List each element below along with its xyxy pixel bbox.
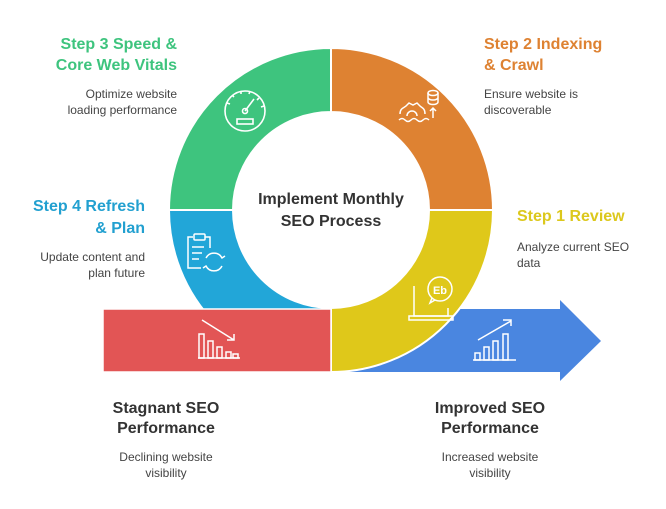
text: step 4 bbox=[33, 198, 145, 280]
icon: review laptop: Eb bbox=[433, 285, 447, 297]
center title: SEO Process bbox=[281, 213, 381, 230]
text: step 2: discoverable bbox=[484, 103, 552, 117]
text: step 1 bbox=[517, 208, 629, 270]
arrow: improved performance bbox=[331, 300, 601, 381]
text: step 4: & Plan bbox=[95, 220, 145, 237]
icon: refresh plan bbox=[188, 234, 225, 271]
text: step 2: Step 2 Indexing bbox=[484, 36, 602, 53]
icon: rising chart bbox=[473, 320, 516, 360]
center title bbox=[258, 191, 404, 230]
text: step 2 bbox=[484, 36, 602, 117]
text: improved: visibility bbox=[469, 466, 511, 480]
text: stagnant: visibility bbox=[145, 466, 187, 480]
text: stagnant bbox=[113, 400, 219, 480]
text: step 4: Step 4 Refresh bbox=[33, 198, 145, 215]
text: step 3: Optimize website bbox=[86, 87, 177, 101]
text: step 1: Step 1 Review bbox=[517, 208, 625, 225]
text: step 1: Analyze current SEO bbox=[517, 240, 629, 254]
text: stagnant: Performance bbox=[117, 420, 215, 437]
center title: Implement Monthly bbox=[258, 191, 404, 208]
ring segment: step 2 orange bbox=[331, 48, 493, 210]
text: step 3: Step 3 Speed & bbox=[61, 36, 177, 53]
icon: review laptop bbox=[409, 277, 453, 320]
text: step 4: Update content and bbox=[40, 250, 145, 264]
text: step 2: & Crawl bbox=[484, 57, 544, 74]
text: stagnant: Stagnant SEO bbox=[113, 400, 219, 417]
text: step 2: Ensure website is bbox=[484, 87, 578, 101]
ring segment: step 1 yellow bbox=[331, 210, 493, 372]
text: improved: Increased website bbox=[442, 450, 539, 464]
icon: indexing crawl bbox=[399, 90, 438, 122]
icon: speedometer bbox=[225, 91, 265, 131]
text: stagnant: Declining website bbox=[119, 450, 213, 464]
text: step 1: data bbox=[517, 256, 541, 270]
ring segment: step 3 green bbox=[169, 48, 331, 210]
text: step 3 bbox=[56, 36, 177, 117]
red bar: stagnant bbox=[103, 309, 331, 372]
text: improved: Performance bbox=[441, 420, 539, 437]
text: step 3: loading performance bbox=[68, 103, 177, 117]
text: improved: Improved SEO bbox=[435, 400, 545, 417]
text: step 4: plan future bbox=[88, 266, 145, 280]
icon: declining chart bbox=[198, 320, 240, 358]
text: improved bbox=[435, 400, 545, 480]
text: step 3: Core Web Vitals bbox=[56, 57, 177, 74]
ring segment: step 4 blue bbox=[169, 210, 331, 372]
